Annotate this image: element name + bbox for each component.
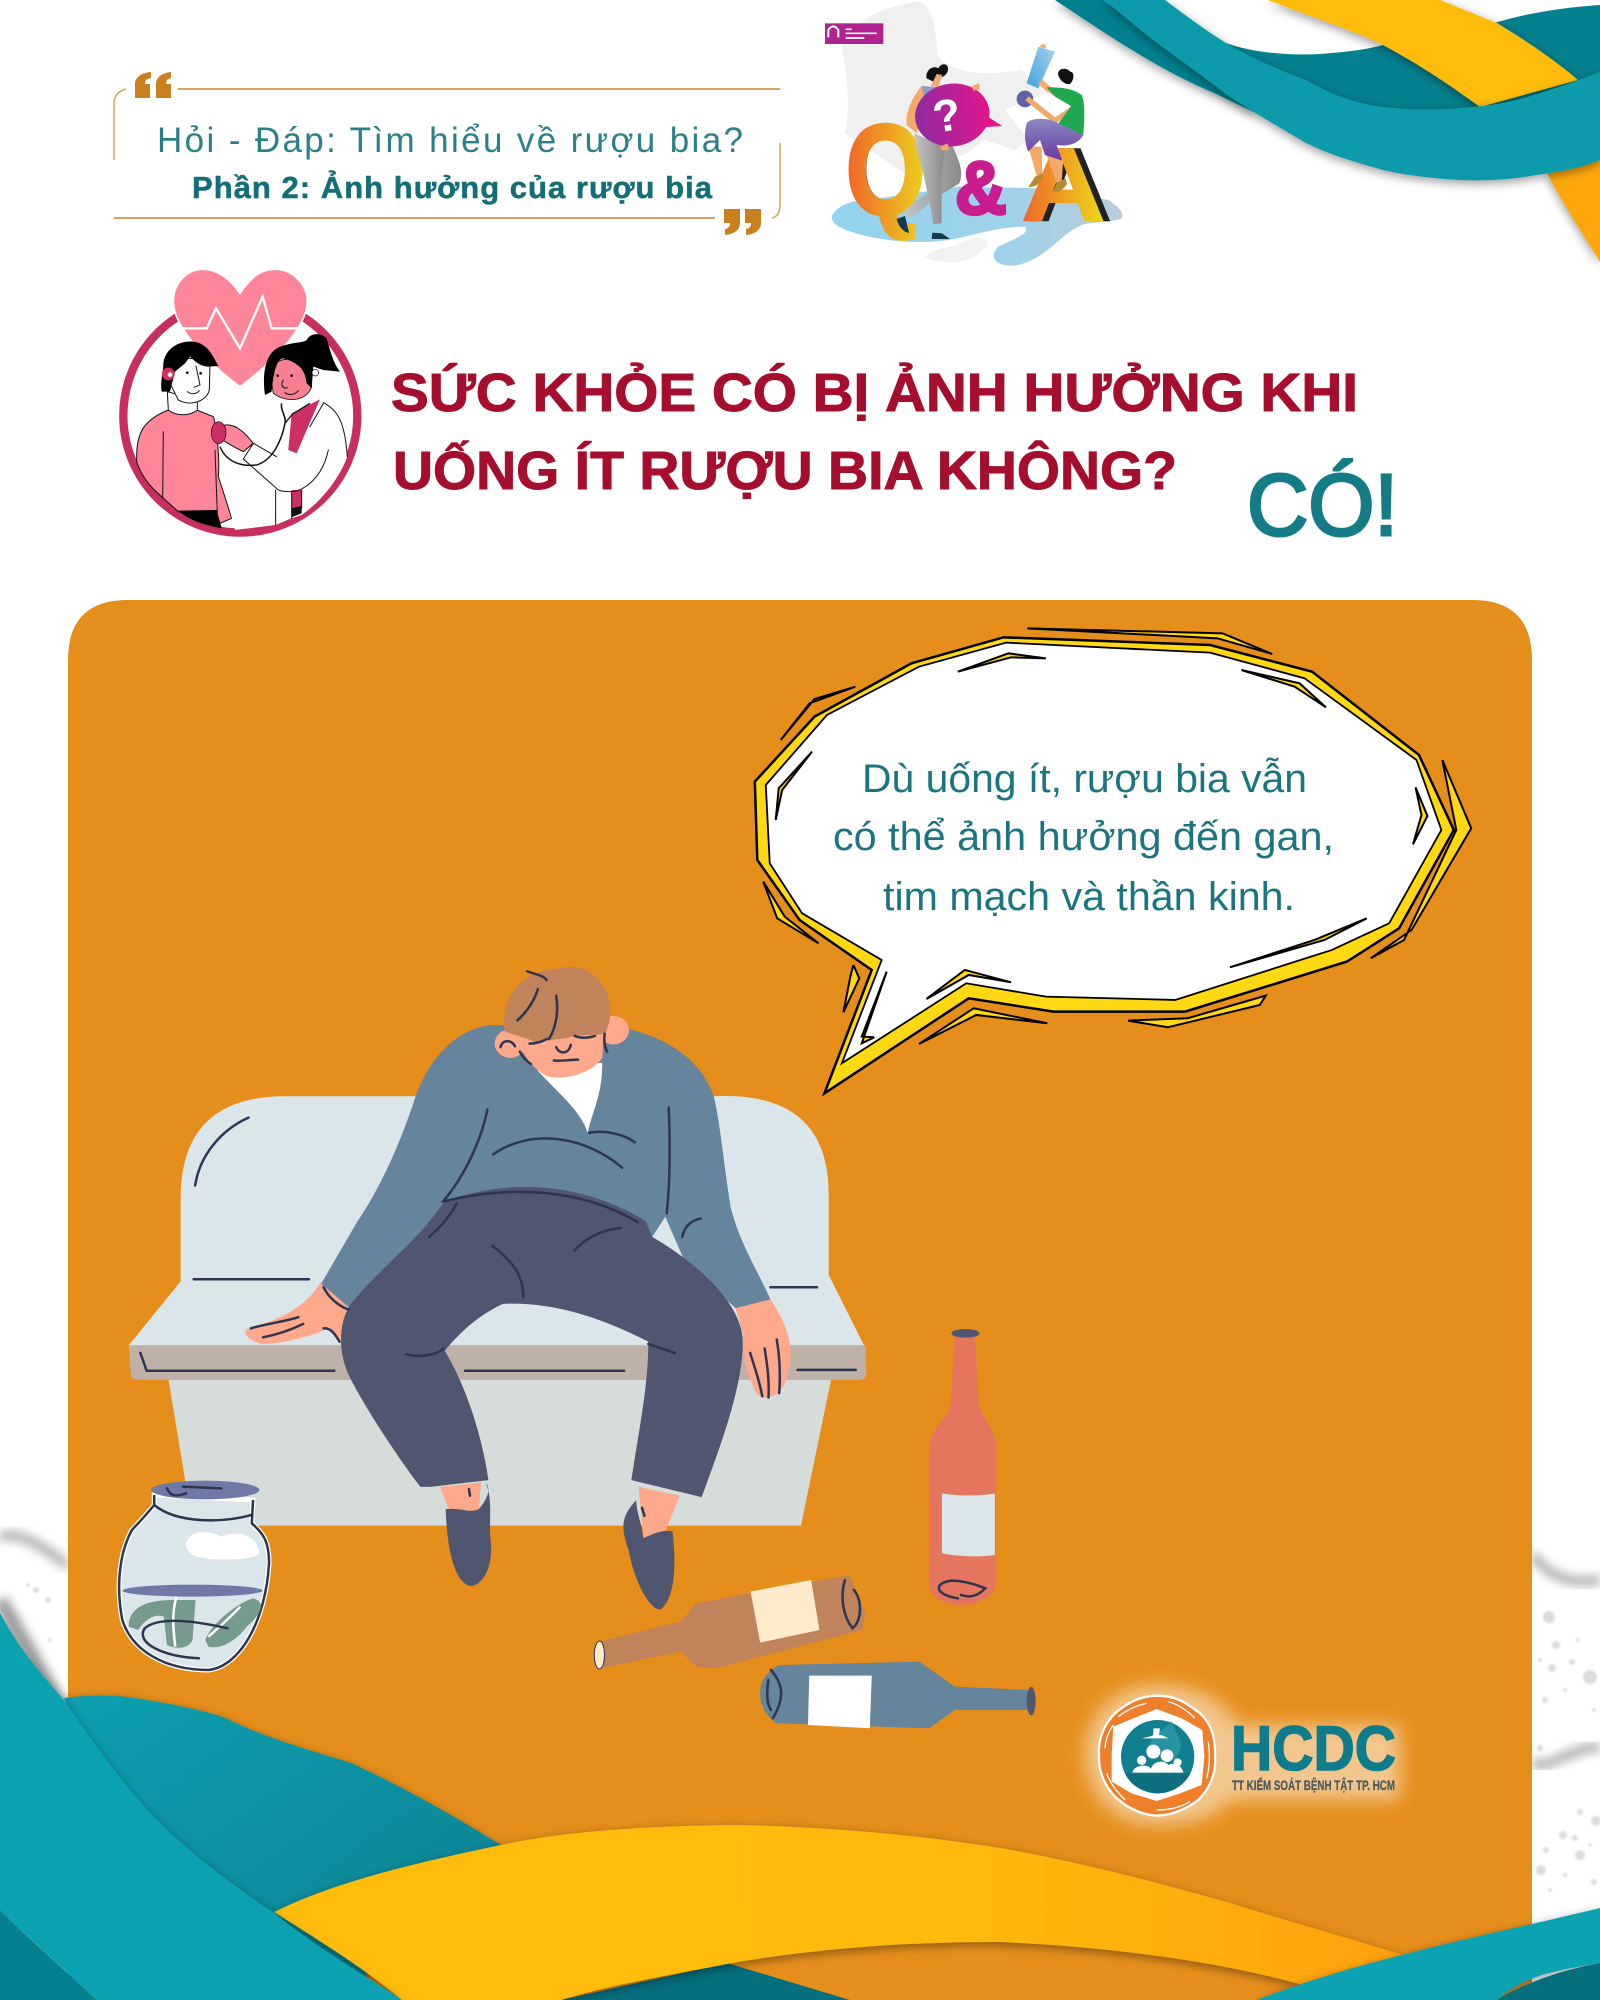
icon: opening quote	[135, 72, 171, 98]
bubble outline	[755, 637, 1454, 1093]
title line 2: Phần 2: Ảnh hưởng của rượu bia	[192, 170, 713, 205]
sofa	[129, 1096, 866, 1526]
figure: man on letter A	[1017, 44, 1084, 192]
left hand	[245, 1281, 353, 1344]
shirt collar	[537, 1063, 602, 1133]
head	[495, 967, 629, 1078]
figure: woman with speech bubble	[897, 64, 1002, 239]
icon: heart	[173, 269, 307, 387]
title line 1: Hỏi - Đáp: Tìm hiểu về rượu bia?	[157, 121, 743, 160]
bubble text: tim mạch và thần kinh.	[883, 875, 1295, 919]
figure: patient	[137, 341, 232, 528]
top right ribbons	[1055, 0, 1600, 262]
letter Q shadow: Q	[848, 98, 926, 240]
question mark: ?	[929, 88, 965, 143]
icon: closing quote	[724, 209, 761, 235]
quote frame	[114, 72, 780, 235]
clothing folds	[251, 1107, 780, 1516]
heading line 1: SỨC KHỎE CÓ BỊ ẢNH HƯỞNG KHI	[391, 363, 1358, 423]
bubble text: Dù uống ít, rượu bia vẫn	[862, 756, 1307, 801]
icon: doctor and patient	[123, 269, 357, 533]
figure: doctor	[211, 334, 347, 530]
icon: fallen brown bottle	[594, 1575, 865, 1669]
orange panel	[68, 600, 1532, 2000]
bottom ribbons	[0, 1613, 1600, 2000]
pulse line	[180, 297, 302, 348]
wreath	[1099, 1696, 1215, 1816]
pants	[341, 1187, 743, 1497]
speech bubble	[755, 628, 1471, 1093]
icon: jar	[119, 1481, 269, 1670]
illustration: man slumped on sofa	[129, 967, 866, 1610]
people symbol	[1132, 1728, 1183, 1773]
bubble accent shards	[763, 628, 1471, 1044]
icon: purple tag	[825, 23, 883, 44]
sweater	[321, 1025, 770, 1310]
icon: upright red bottle	[929, 1329, 996, 1605]
right hand	[736, 1299, 791, 1398]
bubble interior	[766, 643, 1441, 1063]
heading line 2: UỐNG ÍT RƯỢU BIA KHÔNG?	[393, 440, 1177, 501]
illustration: Q and A	[825, 2, 1123, 266]
letter ampersand: &	[955, 146, 1007, 230]
foam background	[0, 1535, 1600, 1892]
icon: fallen blue bottle	[760, 1662, 1036, 1728]
letter Q: Q	[846, 99, 926, 242]
ankles	[440, 1482, 680, 1538]
teal disk	[1121, 1720, 1194, 1793]
shoes	[446, 1482, 674, 1610]
answer: CÓ!	[1247, 457, 1398, 554]
letter A shadow: A	[1028, 127, 1112, 242]
letter A: A	[1022, 127, 1105, 242]
logo: HCDC	[1085, 1685, 1400, 1825]
bubble text	[833, 756, 1334, 919]
logo subtitle: TT KIỂM SOÁT BỆNH TẬT TP. HCM	[1232, 1778, 1395, 1793]
bubble text: có thể ảnh hưởng đến gan,	[833, 815, 1334, 859]
logo wordmark: HCDC	[1231, 1714, 1396, 1784]
